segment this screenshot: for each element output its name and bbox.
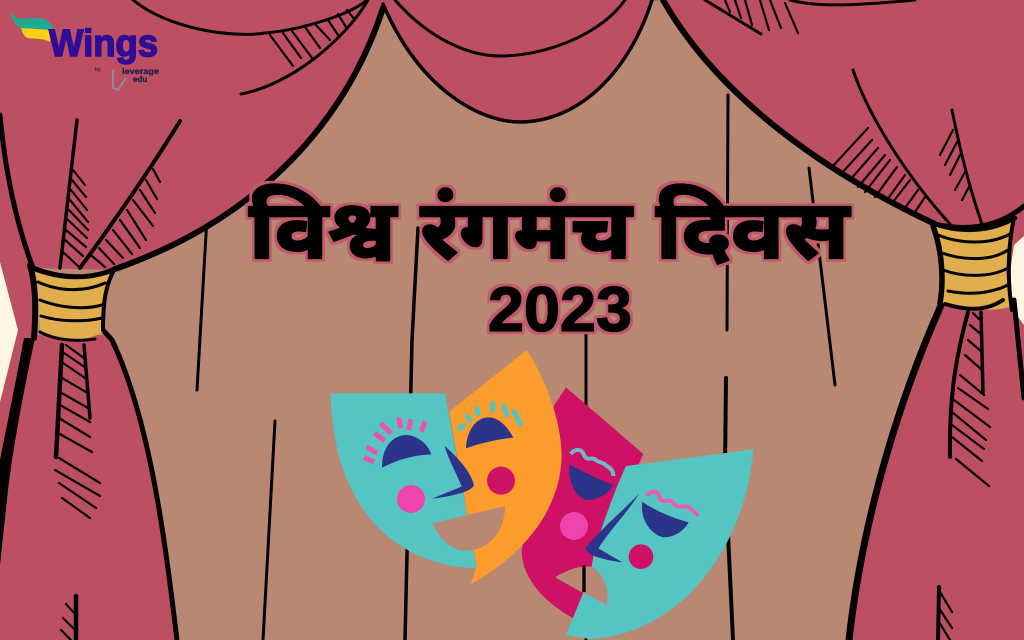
leverage wordmark: leverage xyxy=(122,67,160,76)
teal sad mask xyxy=(566,449,753,639)
cream side gaps xyxy=(0,236,1024,402)
logo flag: yellow wave xyxy=(21,28,52,42)
year: 2023 xyxy=(488,275,632,345)
title: विश्व रंगमंच दिवस xyxy=(249,185,851,276)
left outer curtain edge xyxy=(0,338,35,565)
logo wordmark: Wings xyxy=(49,23,158,65)
theatre masks xyxy=(331,350,753,639)
left curtain tie xyxy=(30,265,115,340)
teal smiling mask xyxy=(331,393,477,568)
logo by-line: by xyxy=(95,67,101,73)
logo flag: teal wave xyxy=(12,10,54,30)
frown mouth xyxy=(555,566,608,605)
leverage edu mark xyxy=(113,70,126,90)
backdrop line seen through mouth xyxy=(579,565,589,592)
logo: Wings by leverage edu xyxy=(12,10,160,90)
right curtain tie xyxy=(933,218,1015,310)
orange mask xyxy=(449,350,562,584)
smile mouth xyxy=(433,506,505,551)
magenta mask xyxy=(522,387,643,618)
backdrop vertical fold lines xyxy=(197,95,835,640)
edu wordmark: edu xyxy=(133,75,147,84)
